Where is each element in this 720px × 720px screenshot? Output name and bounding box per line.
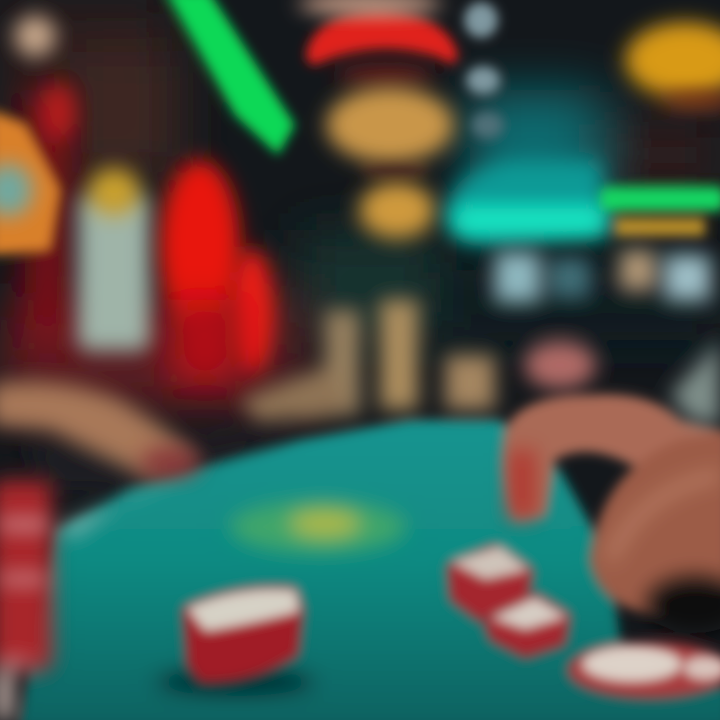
teal neon arc xyxy=(445,160,610,245)
upper window lights xyxy=(464,2,503,138)
orange lamp upper xyxy=(326,87,454,163)
finger crease xyxy=(610,475,720,560)
lower finger xyxy=(590,430,720,615)
finger shading xyxy=(647,577,720,633)
chip right one xyxy=(447,545,533,622)
sign teal centre xyxy=(0,164,32,216)
panel: left chip stack xyxy=(0,480,52,720)
knuckle highlight xyxy=(524,341,596,389)
icon: green neon streak xyxy=(165,0,295,155)
orange sign xyxy=(0,110,60,255)
red hat xyxy=(306,12,458,65)
chip base xyxy=(0,670,13,720)
sleeve xyxy=(670,340,720,425)
background glow zones xyxy=(0,0,720,410)
pale top band xyxy=(298,0,442,15)
chip large xyxy=(183,587,303,682)
chip shadow xyxy=(157,668,313,696)
chip pale stripes xyxy=(0,520,48,667)
left foreground dark edge xyxy=(20,420,300,490)
orange edge xyxy=(660,90,720,110)
red lantern large xyxy=(160,160,240,330)
yellow top right light xyxy=(625,22,720,98)
table logo xyxy=(230,501,406,553)
back of hand xyxy=(504,394,720,520)
red sleeve glow xyxy=(140,446,200,478)
panel: left hand xyxy=(0,382,200,478)
table lighter edge xyxy=(55,460,220,535)
dark red below hat xyxy=(335,62,435,86)
pale panel xyxy=(78,195,150,350)
lamp shadow xyxy=(360,162,430,178)
panel: right neon signs xyxy=(445,2,720,302)
green neon bar xyxy=(600,187,720,211)
panel: right hand xyxy=(504,340,720,633)
bright teal bar xyxy=(452,205,607,235)
panel: central hanging lights xyxy=(298,0,458,238)
panel: foreground chips xyxy=(157,545,720,698)
panel: left signage and lanterns xyxy=(0,16,274,385)
ceiling light xyxy=(15,16,55,56)
finger red underside xyxy=(508,450,536,518)
red lantern lower xyxy=(230,248,274,372)
panel: table felt xyxy=(18,420,720,720)
chip flat xyxy=(568,642,720,698)
pale windows xyxy=(495,250,710,302)
chip column xyxy=(0,480,52,670)
forearm xyxy=(0,382,195,478)
red light xyxy=(42,84,74,140)
dark red column xyxy=(25,90,70,350)
yellow strip xyxy=(615,218,705,236)
panel yellow top xyxy=(88,168,140,216)
red glow xyxy=(170,300,240,385)
orange lamp lower xyxy=(359,182,435,238)
panel: tan pillars xyxy=(240,300,495,425)
chip right two xyxy=(483,593,570,658)
